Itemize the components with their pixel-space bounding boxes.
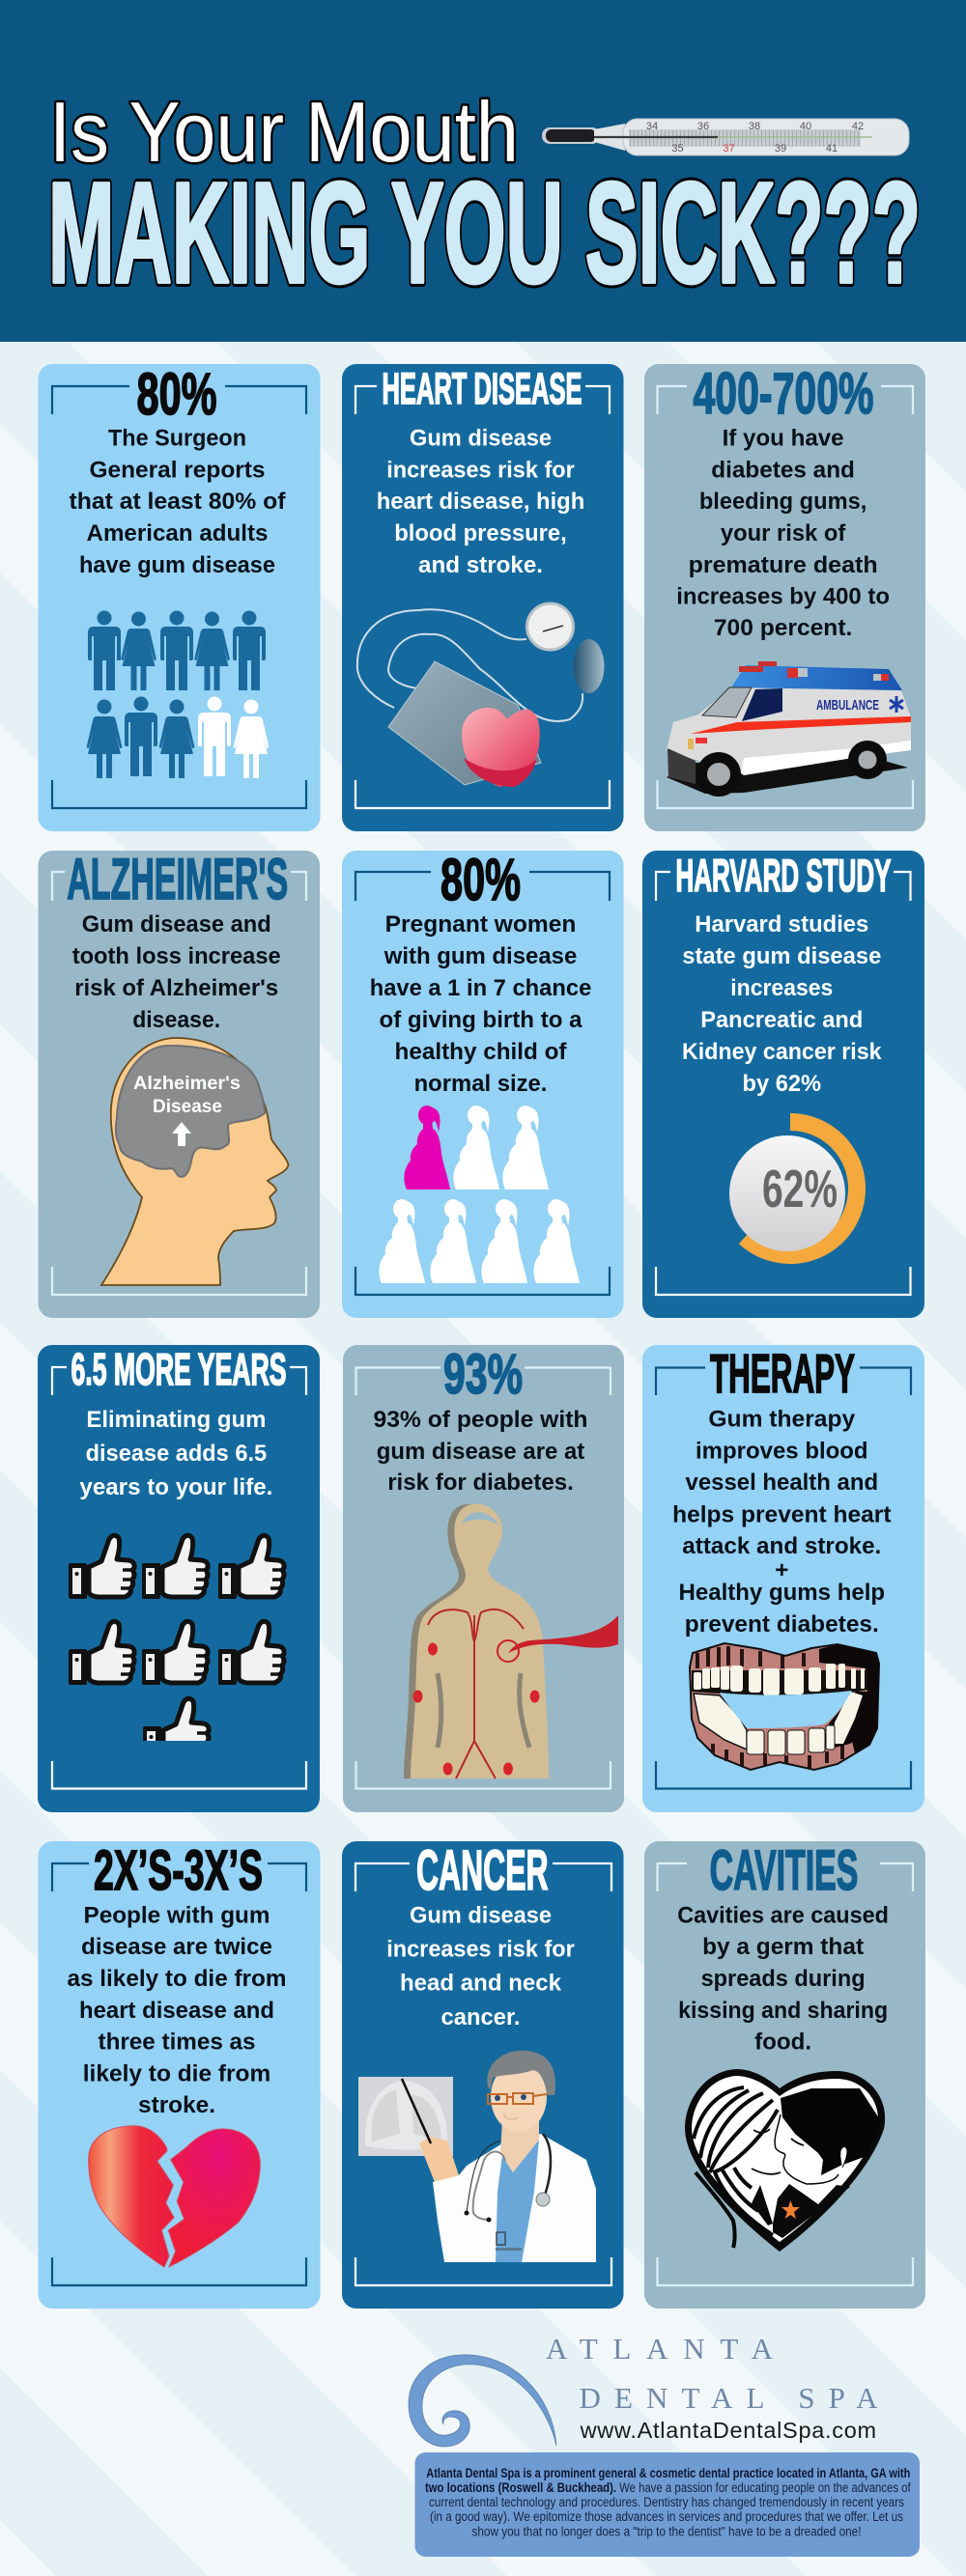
body text: increases risk for — [386, 1937, 575, 1963]
body text: as likely to die from — [68, 1966, 286, 1992]
footer logo — [409, 2332, 878, 2447]
about text: show you that no longer does a "trip to the dentist" have to be a dreaded one! — [471, 2525, 862, 2539]
panel: Harvard study — [642, 850, 924, 1318]
body text: your risk of — [721, 520, 846, 546]
body text: improves blood — [696, 1439, 868, 1465]
body text: increases by 400 to — [676, 583, 890, 610]
body text: Cavities are caused — [677, 1903, 889, 1929]
body text: If you have — [723, 425, 844, 452]
icon: human body with arteries — [404, 1504, 618, 1778]
frame — [656, 872, 910, 1295]
header band — [0, 0, 966, 342]
body text: heart disease, high — [377, 489, 584, 515]
body text: 93% of people with — [373, 1407, 587, 1433]
body text: disease adds 6.5 — [86, 1441, 267, 1467]
icon: people — [87, 610, 269, 778]
body text: stroke. — [138, 2092, 215, 2118]
icon: doctor with x-ray — [358, 2051, 596, 2262]
body text: three times as — [99, 2030, 255, 2056]
heading: 400-700% — [694, 361, 873, 426]
body text: tooth loss increase — [72, 943, 281, 969]
body text: and stroke. — [418, 552, 543, 578]
body text: Eliminating gum — [86, 1407, 266, 1433]
body text: by 62% — [742, 1071, 821, 1097]
panel: cancer — [342, 1839, 624, 2309]
about text: (in a good way). We epitomize those advances in services and procedures that we offer. Let us — [430, 2509, 903, 2524]
body text: attack and stroke. — [682, 1533, 881, 1559]
panel: 400-700% — [644, 361, 925, 831]
icon: ambulance — [667, 661, 911, 797]
icon: head with brain — [101, 1038, 288, 1285]
body text: with gum disease — [384, 943, 577, 969]
frame — [52, 386, 306, 808]
icon: kissing couple in heart — [685, 2069, 885, 2252]
body text: Gum therapy — [708, 1407, 856, 1433]
body text: Kidney cancer risk — [682, 1039, 882, 1065]
panel: 2X'S-3X'S — [39, 1839, 321, 2309]
body text: Pregnant women — [385, 911, 576, 938]
body text: state gum disease — [682, 943, 881, 969]
body text: Gum disease — [410, 1903, 552, 1929]
frame — [355, 386, 610, 808]
frame — [52, 1367, 306, 1788]
body text: risk of Alzheimer's — [74, 975, 278, 1001]
about box — [415, 2452, 920, 2557]
website: www.AtlantaDentalSpa.com — [580, 2418, 876, 2443]
heading: CAVITIES — [710, 1839, 858, 1902]
chart: 62% donut: 62% — [762, 1159, 838, 1218]
icon: thermometer: 38 — [749, 121, 760, 132]
heading: CANCER — [416, 1839, 549, 1902]
icon: thermometer: 41 — [826, 143, 838, 154]
heading: 80% — [440, 847, 521, 912]
body text: increases — [730, 975, 833, 1001]
body text: risk for diabetes. — [387, 1470, 574, 1496]
panel: Alzheimer's — [39, 847, 320, 1318]
icon: dentures — [690, 1643, 879, 1770]
icon: thermometer: 42 — [852, 121, 864, 132]
body text: that at least 80% of — [70, 489, 286, 515]
body text: head and neck — [400, 1971, 561, 1997]
icon: thermometer: 34 — [646, 121, 658, 132]
company name: ATLANTA — [546, 2332, 774, 2366]
body text — [72, 911, 281, 1033]
icon: head with brain: Disease — [153, 1097, 222, 1117]
panel: 80% surgeon general — [39, 361, 321, 831]
body text: People with gum — [83, 1903, 270, 1929]
body text — [373, 1407, 587, 1496]
body text — [676, 425, 890, 641]
body text: General reports — [89, 458, 265, 483]
body text: blood pressure, — [394, 520, 567, 546]
body text: diabetes and — [711, 458, 855, 483]
body text: years to your life. — [79, 1474, 272, 1500]
body text — [682, 911, 882, 1097]
frame — [657, 1863, 913, 2285]
panel: therapy — [642, 1343, 924, 1812]
icon: ambulance: AMBULANCE — [816, 697, 879, 714]
heading: HEART DISEASE — [383, 364, 582, 413]
body text — [70, 425, 286, 578]
heading: 6.5 MORE YEARS — [71, 1344, 286, 1394]
body text: by a germ that — [702, 1934, 864, 1960]
body text: vessel health and — [686, 1470, 878, 1496]
icon: pregnant silhouettes — [379, 1106, 580, 1283]
body text: The Surgeon — [108, 425, 246, 452]
body text — [370, 911, 591, 1097]
body text: bleeding gums, — [699, 489, 867, 515]
about text: two locations (Roswell & Buckhead). We have a passion for educating people on the advances of — [425, 2480, 911, 2495]
panel: cavities — [644, 1839, 925, 2309]
icon: thumbs up — [69, 1535, 284, 1762]
body text: Healthy gums help — [678, 1580, 885, 1606]
frame — [355, 872, 610, 1295]
body text: cancer. — [440, 2004, 520, 2030]
body text — [377, 425, 584, 578]
body text — [68, 1903, 286, 2118]
body text: Harvard studies — [695, 911, 868, 938]
body text: increases risk for — [386, 458, 575, 483]
brain label: Alzheimer's — [133, 1074, 241, 1094]
icon: thermometer: 40 — [800, 121, 811, 132]
panel: 80% pregnant women — [342, 847, 624, 1318]
body text: healthy child of — [394, 1039, 567, 1065]
body text: + — [775, 1557, 788, 1583]
frame — [657, 386, 913, 808]
about text — [425, 2466, 911, 2539]
body text: disease. — [132, 1007, 220, 1033]
body text: gum disease are at — [377, 1439, 584, 1465]
body text — [672, 1407, 891, 1638]
body text: of giving birth to a — [379, 1007, 582, 1033]
body text: prevent diabetes. — [685, 1611, 879, 1638]
icon: thermometer: 37 — [723, 143, 735, 154]
body text: Pancreatic and — [700, 1007, 863, 1033]
panel: heart disease — [342, 364, 624, 831]
body text: helps prevent heart — [672, 1502, 891, 1528]
icon: thermometer: 39 — [775, 143, 786, 154]
body text: disease are twice — [81, 1934, 272, 1960]
icon: thermometer: 36 — [697, 121, 709, 132]
panel: 93% diabetes — [343, 1343, 624, 1812]
icon: swirl — [409, 2355, 556, 2447]
about text: current dental technology and procedures. Dentistry has changed tremendously in recent years — [429, 2495, 904, 2509]
panel: 6.5 more years — [38, 1344, 320, 1812]
body text: likely to die from — [83, 2061, 270, 2087]
frame — [52, 1863, 306, 2285]
frame — [52, 872, 306, 1295]
body text: American adults — [87, 520, 269, 546]
body text — [386, 1903, 575, 2030]
body text: Gum disease — [410, 425, 552, 452]
icon: thermometer: 35 — [671, 143, 684, 154]
icon: broken heart — [89, 2126, 260, 2267]
body text: have a 1 in 7 chance — [370, 975, 591, 1001]
footer logo: DENTAL SPA — [580, 2381, 878, 2415]
heading: 93% — [443, 1343, 523, 1406]
heading: 2X’S-3X’S — [94, 1839, 263, 1902]
heading: THERAPY — [710, 1343, 855, 1405]
frame — [355, 1367, 611, 1788]
frame — [656, 1367, 911, 1788]
body text: Gum disease and — [82, 911, 271, 938]
body text: kissing and sharing — [678, 1998, 888, 2024]
body text: 700 percent. — [714, 615, 852, 641]
title line: Is Your Mouth: Is Your Mouth — [49, 84, 519, 180]
body text: premature death — [689, 552, 878, 578]
frame — [355, 1863, 611, 2285]
heading: 80% — [137, 361, 216, 427]
body text: normal size. — [414, 1071, 547, 1097]
body text: heart disease and — [79, 1998, 274, 2024]
icon: blood pressure cuff and heart — [357, 603, 605, 787]
body text: food. — [754, 2030, 811, 2056]
chart: 62% donut — [729, 1122, 857, 1255]
body text — [79, 1407, 272, 1500]
icon: thermometer — [542, 119, 909, 155]
body text: have gum disease — [79, 552, 275, 578]
heading: ALZHEIMER'S — [67, 847, 288, 911]
body text — [677, 1903, 889, 2056]
body text: spreads during — [701, 1966, 866, 1992]
